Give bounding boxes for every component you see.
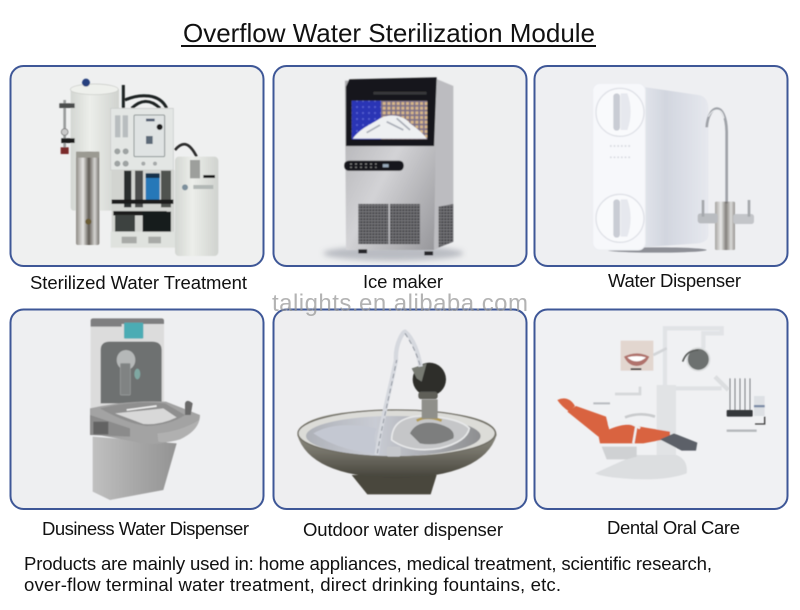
panel: sterilized water treatment bbox=[10, 66, 264, 266]
watermark: talights.en.alibaba.com bbox=[272, 290, 528, 317]
panel: ice maker bbox=[274, 66, 526, 266]
illustration: under-sink purifier with faucet bbox=[593, 83, 754, 253]
label: business water dispenser: Dusiness Water Dispenser bbox=[42, 518, 249, 539]
panel frame bbox=[274, 66, 526, 266]
label: outdoor water dispenser: Outdoor water dispenser bbox=[303, 519, 503, 540]
panel: dental oral care bbox=[534, 310, 788, 509]
title: Overflow Water Sterilization Module bbox=[183, 18, 595, 48]
illustration: water treatment plant bbox=[59, 79, 218, 256]
label: water dispenser: Water Dispenser bbox=[608, 270, 741, 291]
illustration: outdoor drinking fountain bbox=[297, 332, 497, 494]
label: sterilized water treatment: Sterilized Water Treatment bbox=[30, 272, 247, 293]
panel frame bbox=[10, 66, 264, 266]
panel frame bbox=[534, 310, 788, 509]
text block: usage summary: over-flow terminal water treatment, direct drinking fountains, etc. bbox=[24, 574, 561, 595]
panel: business water dispenser bbox=[10, 310, 264, 509]
panel: outdoor water dispenser bbox=[274, 310, 526, 509]
panel frame bbox=[274, 310, 526, 509]
text block: usage summary bbox=[24, 553, 712, 595]
illustration: bottle filling station bbox=[90, 318, 200, 500]
illustration: dental chair bbox=[557, 328, 765, 479]
text block: usage summary: Products are mainly used in: home appliances, medical treatment, scientific research, bbox=[24, 553, 712, 574]
panel frame bbox=[534, 66, 788, 266]
panel frame bbox=[10, 310, 264, 509]
label: ice maker: Ice maker bbox=[363, 271, 443, 292]
illustration: ice maker bbox=[323, 77, 463, 261]
panel: water dispenser bbox=[534, 66, 788, 266]
label: dental oral care: Dental Oral Care bbox=[607, 517, 740, 538]
